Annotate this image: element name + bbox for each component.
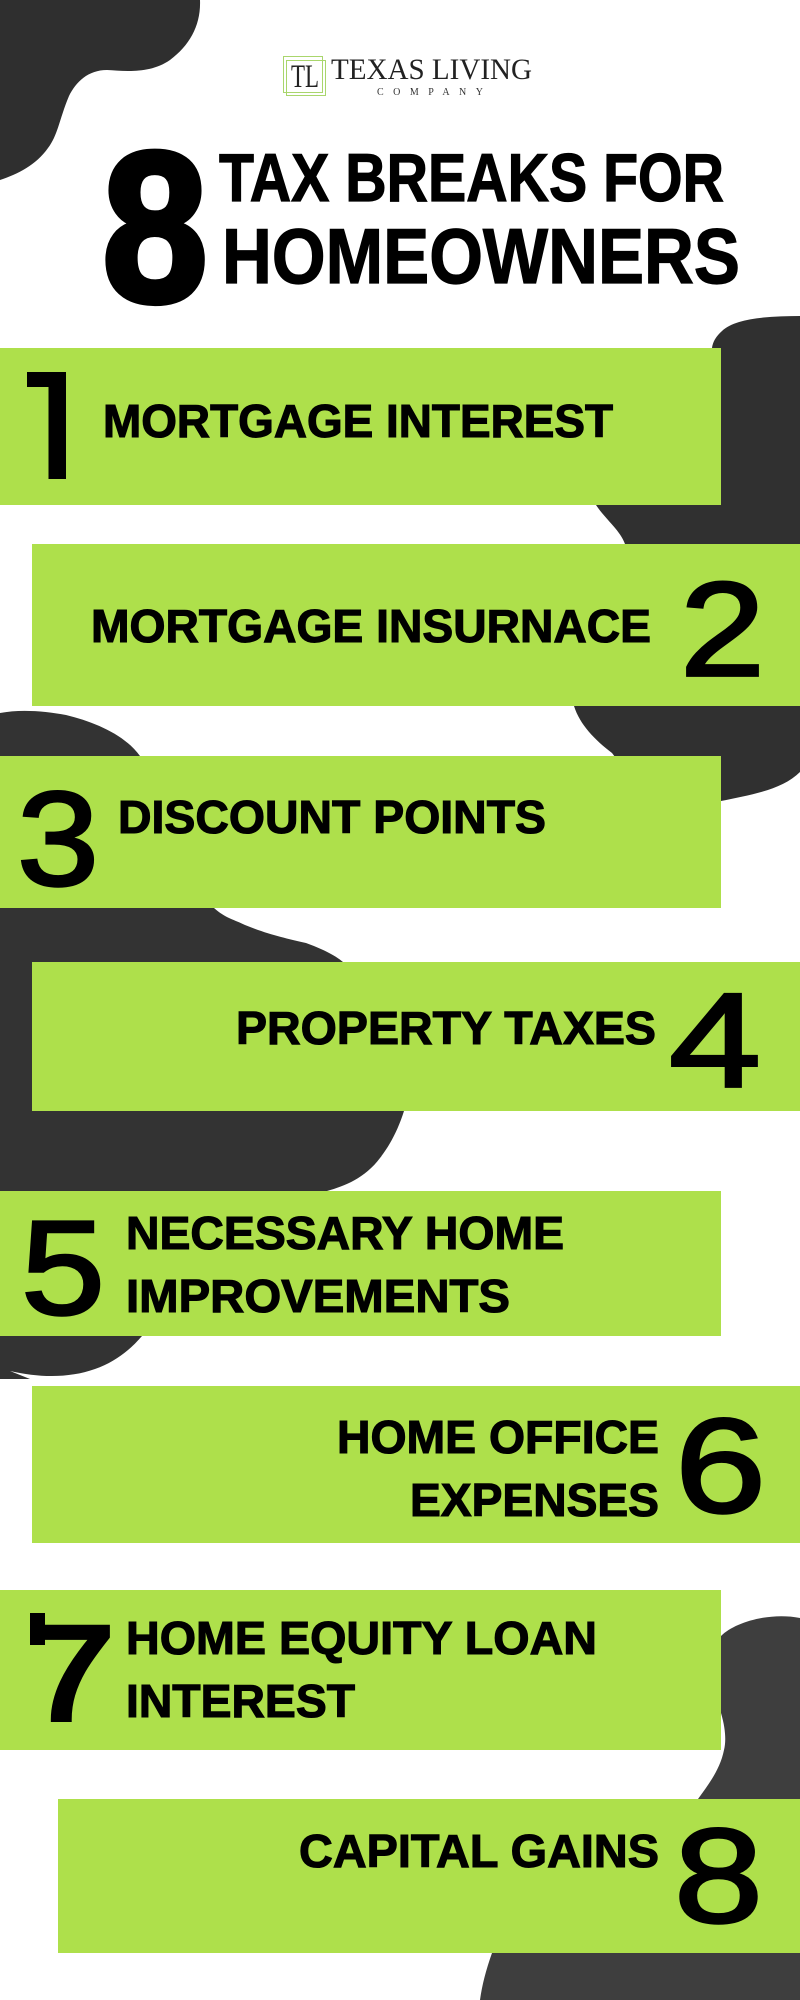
panel 8: capital gains bbox=[58, 1799, 800, 1953]
title: line two: HOMEOWNERS bbox=[222, 212, 740, 300]
blob: right upper bbox=[574, 316, 800, 801]
label: MORTGAGE INTEREST bbox=[103, 395, 613, 447]
label line two: IMPROVEMENTS bbox=[126, 1270, 510, 1322]
panel 6: home office expenses bbox=[32, 1386, 800, 1543]
title bbox=[102, 108, 740, 347]
panel 2: mortgage insurance bbox=[32, 544, 800, 706]
logo icon: TL monogram in green squares bbox=[284, 56, 326, 96]
number 4: 4 bbox=[669, 966, 761, 1116]
number 7: 7 bbox=[25, 1600, 115, 1748]
label line two: INTEREST bbox=[126, 1675, 355, 1727]
panel 4: property taxes bbox=[32, 962, 800, 1116]
logo: Texas Living Company bbox=[284, 53, 532, 98]
label line two: EXPENSES bbox=[410, 1474, 659, 1526]
number 2: 2 bbox=[680, 556, 765, 704]
number 1: 1 bbox=[18, 358, 78, 507]
panel 5: necessary home improvements bbox=[0, 1191, 721, 1343]
logo wordmark: TEXAS LIVING bbox=[331, 53, 532, 86]
blob: left middle bbox=[0, 711, 404, 1379]
label line one: HOME EQUITY LOAN bbox=[126, 1612, 597, 1664]
label line one: HOME OFFICE bbox=[337, 1411, 659, 1463]
label line one: NECESSARY HOME bbox=[126, 1207, 564, 1259]
logo icon: TL monogram in green squares: TL bbox=[291, 59, 319, 95]
blob: bottom right bbox=[480, 1616, 800, 2000]
number 3: 3 bbox=[17, 765, 99, 914]
blob: top left bbox=[0, 0, 200, 180]
label: PROPERTY TAXES bbox=[236, 1002, 656, 1054]
logo subline: COMPANY bbox=[377, 87, 483, 98]
panel 3: discount points bbox=[0, 756, 721, 914]
number 8: 8 bbox=[674, 1802, 763, 1951]
number 6: 6 bbox=[675, 1392, 766, 1541]
title: big number 8: 8 bbox=[102, 108, 208, 347]
number 5: 5 bbox=[21, 1194, 105, 1343]
panel 1: mortgage interest bbox=[0, 348, 721, 507]
panel 7: home equity loan interest bbox=[0, 1590, 721, 1750]
label: CAPITAL GAINS bbox=[299, 1825, 659, 1877]
number 1 bbox=[27, 372, 66, 479]
label: DISCOUNT POINTS bbox=[118, 791, 546, 843]
label: MORTGAGE INSURNACE bbox=[91, 600, 651, 652]
